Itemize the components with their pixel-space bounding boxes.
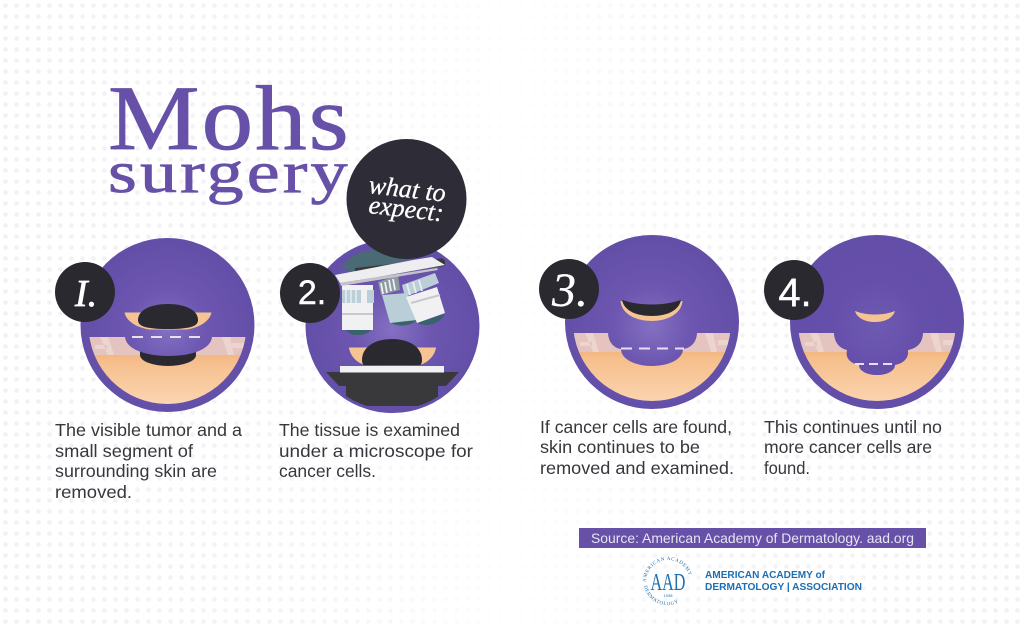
slide with tissue <box>340 339 444 372</box>
panel: step 3 illustration <box>565 235 739 413</box>
excision line 3 <box>621 348 684 350</box>
badge: number 4 <box>764 260 824 320</box>
title: Mohs <box>108 68 351 170</box>
excision line 4 <box>855 363 897 365</box>
step 1 text <box>55 420 242 502</box>
microscope arm <box>335 257 445 286</box>
step 2 text: under a microscope for <box>279 441 473 461</box>
logo: American Academy of Dermatology Association: AMERICAN ACADEMY <box>642 556 692 582</box>
step 3 text: If cancer cells are found, <box>540 417 732 437</box>
skin cross-section 1 <box>90 337 246 404</box>
step 2 text: The tissue is examined <box>279 420 460 440</box>
badge: number 2: 2. <box>298 274 326 312</box>
step 2 text: cancer cells. <box>279 461 376 481</box>
source bar: Source: American Academy of Dermatology. aad.org <box>591 530 914 546</box>
logo: American Academy of Dermatology Association <box>642 556 862 606</box>
step 3 text <box>540 417 734 478</box>
badge: number 3 <box>539 259 599 319</box>
removed tissue 1 <box>124 312 212 330</box>
badge: what to expect <box>346 139 466 259</box>
microscope stage <box>326 372 459 406</box>
badge: number 4: 4. <box>778 271 812 315</box>
objective lens middle <box>378 275 417 326</box>
badge: number 1 <box>55 262 115 322</box>
step 3 text: removed and examined. <box>540 458 734 478</box>
removed tissue 3 <box>620 301 682 321</box>
logo: American Academy of Dermatology Association: DERMATOLOGY <box>644 585 678 606</box>
badge: number 1: I. <box>74 273 97 315</box>
objective lens right <box>402 273 445 325</box>
removed tissue 4 <box>855 311 895 322</box>
logo: American Academy of Dermatology Association: AMERICAN ACADEMY of <box>705 570 826 581</box>
panel: step 2 illustration <box>306 239 480 413</box>
logo: American Academy of Dermatology Association: DERMATOLOGY | ASSOCIATION <box>705 582 862 593</box>
excision line 1 <box>132 336 205 338</box>
panel: step 1 illustration <box>80 238 254 412</box>
step 3 text: skin continues to be <box>540 437 700 457</box>
step 1 text: small segment of <box>55 441 193 461</box>
step 2 text <box>279 420 473 481</box>
skin cross-section 3 <box>574 333 730 401</box>
step 4 text: found. <box>764 458 810 478</box>
panel: step 4 illustration <box>790 235 964 413</box>
step 4 text: more cancer cells are <box>764 437 932 457</box>
badge: number 2 <box>280 263 340 323</box>
logo: American Academy of Dermatology Association: AAD <box>650 570 685 596</box>
badge: number 3: 3. <box>551 264 588 317</box>
title: surgery <box>108 140 351 205</box>
microscope <box>326 250 459 406</box>
step 1 text: removed. <box>55 482 132 502</box>
skin cross-section 4 <box>798 333 956 401</box>
step 1 text: The visible tumor and a <box>55 420 242 440</box>
step 1 text: surrounding skin are <box>55 461 217 481</box>
badge: what to expect: expect: <box>367 190 445 227</box>
objective lens left <box>342 285 374 335</box>
logo: American Academy of Dermatology Association: 1938 <box>664 593 673 598</box>
step 4 text: This continues until no <box>764 417 942 437</box>
badge: what to expect: what to <box>367 170 447 208</box>
step 4 text <box>764 417 942 478</box>
